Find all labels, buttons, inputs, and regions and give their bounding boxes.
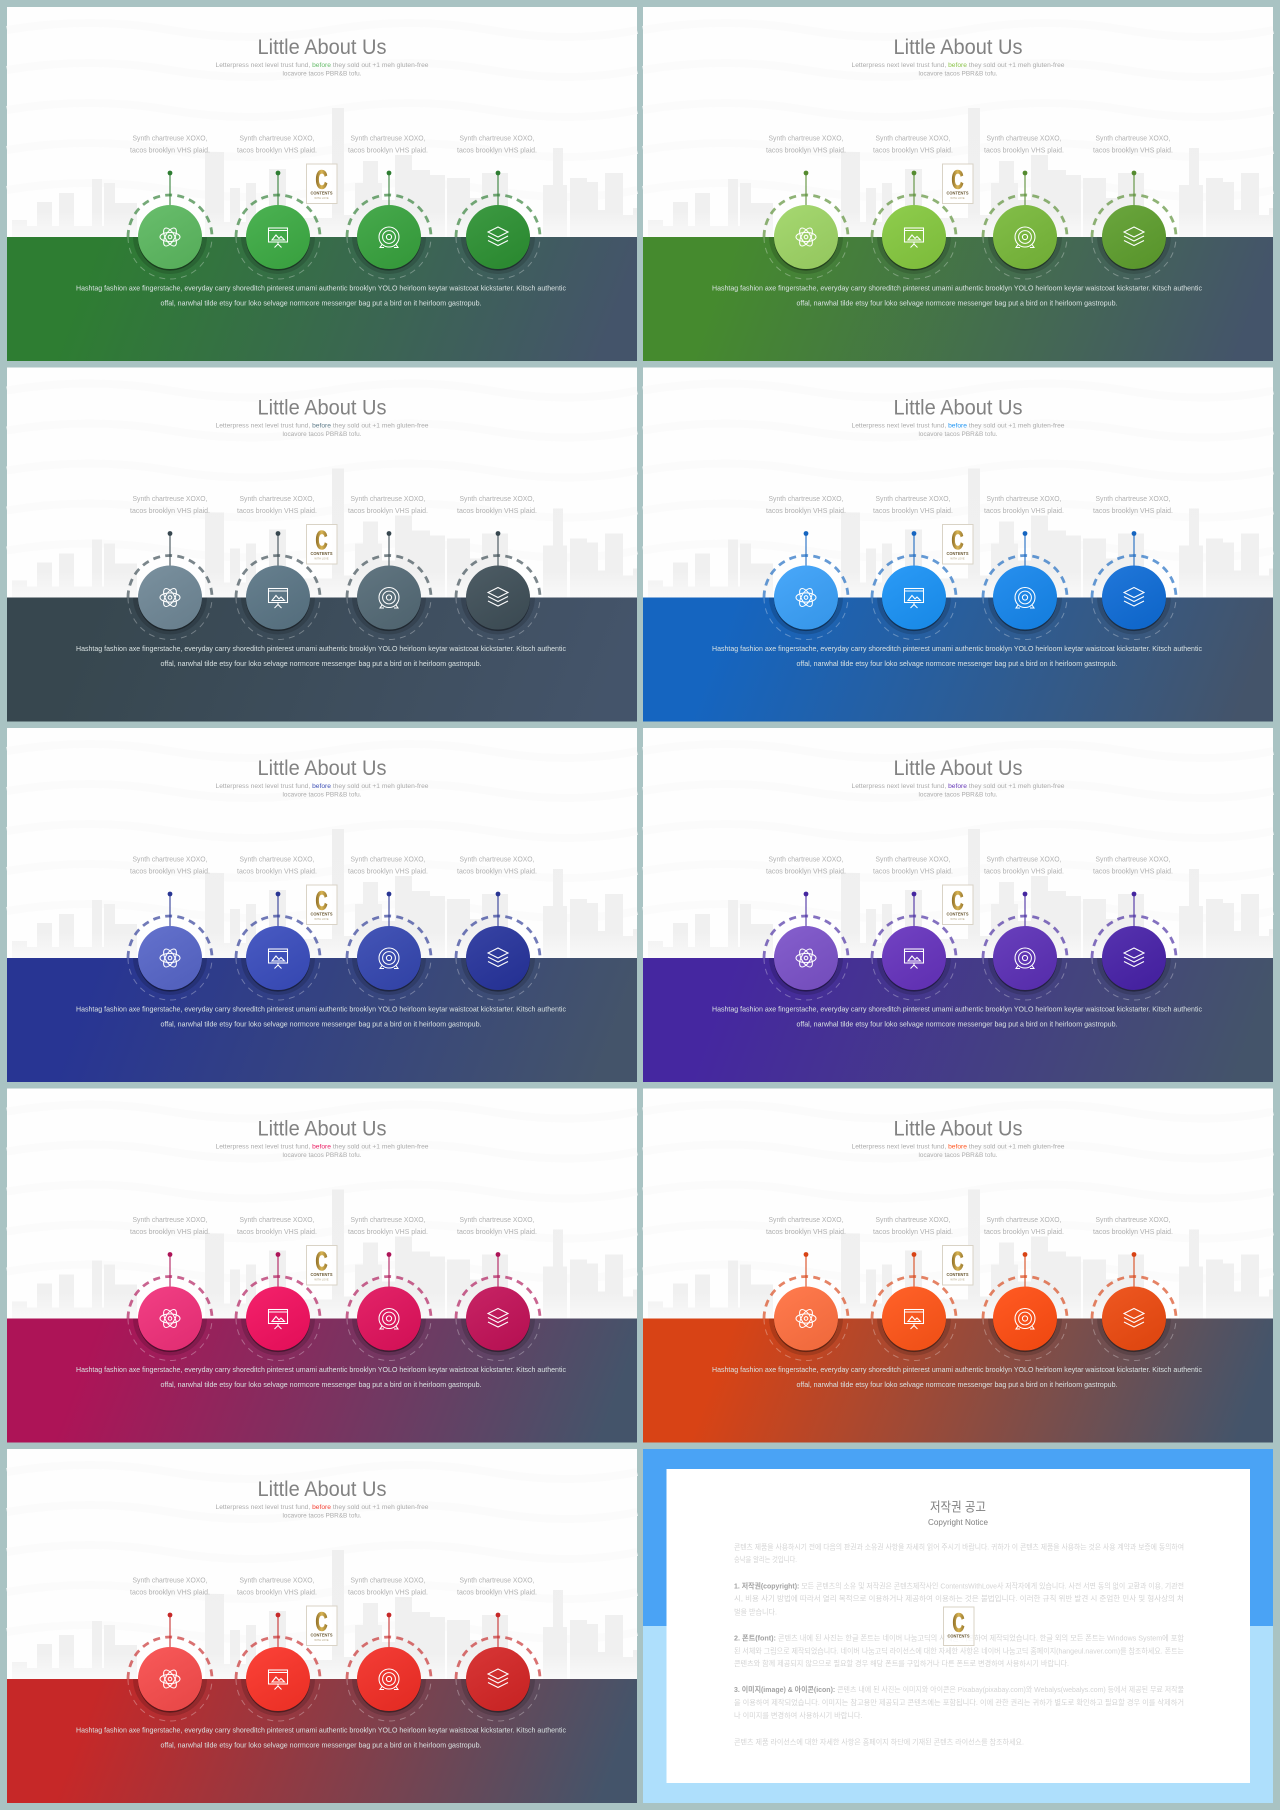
labels: Synth chartreuse XOXO, <box>460 854 534 864</box>
title: Little About Us <box>894 36 1022 59</box>
intro text <box>852 783 1065 798</box>
labels <box>130 1215 537 1236</box>
labels: tacos brooklyn VHS plaid. <box>984 146 1064 154</box>
labels: Synth chartreuse XOXO, <box>1096 1215 1170 1224</box>
labels: Synth chartreuse XOXO, <box>876 134 950 142</box>
labels: Synth chartreuse XOXO, <box>986 494 1062 503</box>
band text <box>76 1726 566 1750</box>
logo: CONTENTS <box>948 1634 970 1638</box>
white sheet <box>666 1469 1250 1783</box>
intro text <box>216 422 429 438</box>
labels: Synth chartreuse XOXO, <box>132 854 208 864</box>
logo: C <box>316 1246 328 1276</box>
labels: tacos brooklyn VHS plaid. <box>766 146 846 154</box>
labels: tacos brooklyn VHS plaid. <box>873 866 953 876</box>
labels: Synth chartreuse XOXO, <box>350 494 426 503</box>
band text: offal, narwhal tilde etsy four loko selvage normcore messenger bag put a bird on it heirloom gastropub. <box>796 300 1118 308</box>
labels: Synth chartreuse XOXO, <box>240 134 314 142</box>
node: layers <box>1092 892 1176 1000</box>
panel: pink <box>7 1088 637 1442</box>
intro text: locavore tacos PBR&B tofu. <box>282 792 362 798</box>
intro text <box>216 1144 429 1159</box>
node: presentation <box>236 1252 320 1360</box>
node: presentation <box>872 171 956 279</box>
labels: Synth chartreuse XOXO, <box>240 1215 314 1224</box>
logo <box>942 1246 973 1285</box>
band text: Hashtag fashion axe fingerstache, everyday carry shoreditch pinterest umami authentic brooklyn YOLO heirloom keytar waistcoat kickstarter. Kitsch authentic <box>76 645 566 653</box>
panel background <box>7 728 637 1082</box>
logo: WITH LOVE <box>950 556 965 560</box>
labels: tacos brooklyn VHS plaid. <box>130 506 210 515</box>
logo <box>942 524 973 564</box>
node: target <box>983 1252 1067 1360</box>
labels: tacos brooklyn VHS plaid. <box>130 866 210 876</box>
logo <box>306 1246 337 1285</box>
title: Little About Us <box>258 1118 386 1140</box>
band text: offal, narwhal tilde etsy four loko selvage normcore messenger bag put a bird on it heirloom gastropub. <box>796 1020 1118 1028</box>
labels: tacos brooklyn VHS plaid. <box>873 146 953 154</box>
node: target <box>347 531 431 640</box>
paragraph 1: 1. 저작권(copyright): 모든 콘텐츠의 소유 및 저작권은 콘텐츠제작사인 ContentsWithLove사 저작자에게 있습니다. 사전 서면 동의 없이 교환과 이용, 기관전 <box>734 1582 1184 1590</box>
intro text: locavore tacos PBR&B tofu. <box>918 431 998 438</box>
band text <box>76 1366 566 1389</box>
labels: Synth chartreuse XOXO, <box>350 1215 426 1224</box>
labels: tacos brooklyn VHS plaid. <box>237 866 317 876</box>
panel: orange <box>643 1088 1273 1442</box>
title: Little About Us <box>894 396 1022 420</box>
labels: tacos brooklyn VHS plaid. <box>457 146 537 154</box>
panel background <box>643 1088 1273 1442</box>
labels: Synth chartreuse XOXO, <box>986 1215 1062 1224</box>
intro text: Letterpress next level trust fund, before they sold out +1 meh gluten-free <box>216 62 429 69</box>
node: presentation <box>872 1252 956 1360</box>
title: Little About Us <box>258 36 386 59</box>
paragraph 2: 된 서체와 그림으로 제작되었습니다. 네이버 나눔고딕 라이선스에 대한 자세한 사항은 네이버 나눔고딕 홈페이지(hangeul.naver.com)를 참조하세요. 폰트는 <box>734 1646 1184 1656</box>
labels: Synth chartreuse XOXO, <box>768 134 844 142</box>
paragraph 2 <box>734 1634 1184 1668</box>
intro text <box>852 422 1065 438</box>
logo: CONTENTS <box>310 1272 332 1277</box>
skyline <box>7 23 637 237</box>
band text: offal, narwhal tilde etsy four loko selvage normcore messenger bag put a bird on it heirloom gastropub. <box>160 1742 482 1750</box>
logo: CONTENTS <box>946 190 968 196</box>
labels: tacos brooklyn VHS plaid. <box>873 506 953 515</box>
node: target <box>983 171 1067 279</box>
labels: Synth chartreuse XOXO, <box>240 854 314 864</box>
intro text: Letterpress next level trust fund, before they sold out +1 meh gluten-free <box>216 1144 429 1150</box>
logo: C <box>316 164 328 194</box>
panel background <box>7 7 637 361</box>
panel: purple <box>643 728 1273 1082</box>
intro text: Letterpress next level trust fund, before they sold out +1 meh gluten-free <box>216 1504 429 1511</box>
node: atom <box>764 1252 848 1360</box>
logo: CONTENTS <box>310 912 332 916</box>
intro text: locavore tacos PBR&B tofu. <box>918 1152 998 1159</box>
labels: tacos brooklyn VHS plaid. <box>348 146 428 154</box>
node: atom <box>128 171 212 279</box>
node: atom <box>128 1252 212 1360</box>
node: target <box>347 892 431 1000</box>
blue background bottom <box>643 1626 1273 1803</box>
logo: C <box>316 1606 328 1636</box>
labels: Synth chartreuse XOXO, <box>240 1576 314 1584</box>
logo: WITH LOVE <box>314 917 329 921</box>
logo <box>306 1606 337 1646</box>
paragraph 1 <box>734 1582 1184 1616</box>
paragraph 3: 나 이미지를 변경하여 사용하시기 바랍니다. <box>734 1711 862 1720</box>
logo <box>306 885 337 924</box>
paragraph 2: 콘텐츠와 함께 제공되지 않으므로 필요할 경우 해당 폰트를 구입하거나 다른 폰트로 변경하여 사용하시기 바랍니다. <box>734 1659 1069 1668</box>
colour band <box>7 598 637 722</box>
labels: tacos brooklyn VHS plaid. <box>457 1588 537 1596</box>
logo <box>942 164 973 204</box>
labels: Synth chartreuse XOXO, <box>986 854 1062 864</box>
labels: tacos brooklyn VHS plaid. <box>766 1227 846 1236</box>
labels <box>130 1576 537 1596</box>
skyline <box>643 1104 1273 1318</box>
logo <box>942 885 973 924</box>
node: target <box>983 531 1067 640</box>
logo: CONTENTS <box>310 1632 332 1638</box>
intro text <box>216 783 429 798</box>
band text: offal, narwhal tilde etsy four loko selvage normcore messenger bag put a bird on it heirloom gastropub. <box>796 660 1118 668</box>
labels: tacos brooklyn VHS plaid. <box>984 866 1064 876</box>
band text: offal, narwhal tilde etsy four loko selvage normcore messenger bag put a bird on it heirloom gastropub. <box>160 1020 482 1028</box>
node: layers <box>456 1613 540 1721</box>
blue background top <box>643 1449 1273 1626</box>
title: Little About Us <box>894 757 1022 780</box>
node: layers <box>456 1252 540 1360</box>
panel: lime <box>643 7 1273 361</box>
paragraph 1: 시, 비용 사기 방법에 따라서 열리 목적으로 이용하거나 제공하여 이용하는 것은 불법입니다. 이러한 규칙 위반 발견 시 준엄한 민사 및 형사상의 처 <box>734 1594 1184 1603</box>
colour band <box>643 598 1273 722</box>
intro text: locavore tacos PBR&B tofu. <box>918 70 998 78</box>
node: atom <box>764 171 848 279</box>
colour band <box>643 958 1273 1082</box>
skyline <box>7 744 637 958</box>
colour band <box>7 1318 637 1442</box>
logo: C <box>952 164 964 194</box>
panel background <box>643 728 1273 1082</box>
colour band <box>643 237 1273 361</box>
logo: CONTENTS <box>946 551 968 556</box>
logo: CONTENTS <box>946 1272 968 1277</box>
intro text: locavore tacos PBR&B tofu. <box>282 1152 362 1159</box>
node: presentation <box>872 531 956 640</box>
panel background <box>7 368 637 722</box>
intro text: Letterpress next level trust fund, before they sold out +1 meh gluten-free <box>852 62 1065 69</box>
skyline <box>643 384 1273 598</box>
node: atom <box>128 1613 212 1721</box>
labels: Synth chartreuse XOXO, <box>1096 134 1170 142</box>
intro text: Letterpress next level trust fund, before they sold out +1 meh gluten-free <box>852 783 1065 790</box>
intro text: locavore tacos PBR&B tofu. <box>918 792 998 798</box>
panel background <box>7 1088 637 1442</box>
band text: Hashtag fashion axe fingerstache, everyday carry shoreditch pinterest umami authentic brooklyn YOLO heirloom keytar waistcoat kickstarter. Kitsch authentic <box>76 1366 566 1374</box>
colour band <box>7 958 637 1082</box>
node: presentation <box>236 171 320 279</box>
band text <box>76 284 566 308</box>
node: presentation <box>236 1613 320 1721</box>
labels: tacos brooklyn VHS plaid. <box>130 1227 210 1236</box>
node: presentation <box>236 892 320 1000</box>
labels: tacos brooklyn VHS plaid. <box>1093 146 1173 154</box>
intro text: Letterpress next level trust fund, before they sold out +1 meh gluten-free <box>216 783 429 790</box>
title: Little About Us <box>258 757 386 780</box>
band text: Hashtag fashion axe fingerstache, everyday carry shoreditch pinterest umami authentic brooklyn YOLO heirloom keytar waistcoat kickstarter. Kitsch authentic <box>76 1726 566 1734</box>
band text: Hashtag fashion axe fingerstache, everyday carry shoreditch pinterest umami authentic brooklyn YOLO heirloom keytar waistcoat kickstarter. Kitsch authentic <box>712 1006 1202 1014</box>
labels: tacos brooklyn VHS plaid. <box>984 1227 1064 1236</box>
title: Little About Us <box>258 1478 386 1501</box>
labels <box>130 854 537 876</box>
labels: tacos brooklyn VHS plaid. <box>766 506 846 515</box>
node: target <box>983 892 1067 1000</box>
logo: C <box>952 1608 965 1638</box>
labels: Synth chartreuse XOXO, <box>132 1576 208 1584</box>
band text <box>712 645 1202 668</box>
labels <box>766 134 1173 154</box>
paragraph 1: 벌을 받습니다. <box>734 1608 777 1616</box>
panel: red <box>7 1449 637 1803</box>
labels: Synth chartreuse XOXO, <box>350 1576 426 1584</box>
labels: tacos brooklyn VHS plaid. <box>237 1227 317 1236</box>
labels: Synth chartreuse XOXO, <box>132 134 208 142</box>
intro paragraph <box>734 1542 1184 1564</box>
node: layers <box>1092 171 1176 279</box>
paragraph 2: 2. 폰트(font): 콘텐츠 내에 된 사진는 한글 폰트는 네이버 나눔고딕의 서체를 기본하여 제작되었습니다. 한글 외의 모든 폰트는 Windows System에 포함 <box>734 1634 1184 1642</box>
labels: tacos brooklyn VHS plaid. <box>1093 866 1173 876</box>
closing line: 콘텐츠 제품 라이선스에 대한 자세한 사항은 홈페이지 하단에 기재된 콘텐츠 라이선스를 참조하세요. <box>734 1738 1024 1746</box>
skyline <box>7 384 637 598</box>
labels <box>766 494 1173 515</box>
intro text <box>216 1504 429 1520</box>
labels: tacos brooklyn VHS plaid. <box>348 866 428 876</box>
logo: WITH LOVE <box>314 1638 329 1642</box>
logo: WITH LOVE <box>950 196 965 200</box>
logo: C <box>316 525 328 555</box>
labels: tacos brooklyn VHS plaid. <box>1093 1227 1173 1236</box>
band text: offal, narwhal tilde etsy four loko selvage normcore messenger bag put a bird on it heirloom gastropub. <box>160 1381 482 1389</box>
colour band <box>643 1318 1273 1442</box>
labels: tacos brooklyn VHS plaid. <box>873 1227 953 1236</box>
labels: Synth chartreuse XOXO, <box>768 494 844 503</box>
logo: WITH LOVE <box>950 1278 965 1282</box>
labels: Synth chartreuse XOXO, <box>460 1576 534 1584</box>
band text: offal, narwhal tilde etsy four loko selvage normcore messenger bag put a bird on it heirloom gastropub. <box>796 1381 1118 1389</box>
band text: Hashtag fashion axe fingerstache, everyday carry shoreditch pinterest umami authentic brooklyn YOLO heirloom keytar waistcoat kickstarter. Kitsch authentic <box>712 645 1202 653</box>
labels: tacos brooklyn VHS plaid. <box>1093 506 1173 515</box>
node: target <box>347 1252 431 1360</box>
band text: Hashtag fashion axe fingerstache, everyday carry shoreditch pinterest umami authentic brooklyn YOLO heirloom keytar waistcoat kickstarter. Kitsch authentic <box>76 284 566 292</box>
colour band <box>7 237 637 361</box>
panel background <box>643 7 1273 361</box>
logo: C <box>316 886 328 916</box>
node: target <box>347 1613 431 1721</box>
labels: Synth chartreuse XOXO, <box>876 854 950 864</box>
labels: Synth chartreuse XOXO, <box>768 854 844 864</box>
title: Little About Us <box>894 1118 1022 1140</box>
labels: tacos brooklyn VHS plaid. <box>237 146 317 154</box>
band text <box>712 1006 1202 1028</box>
node: layers <box>456 171 540 279</box>
labels: Synth chartreuse XOXO, <box>986 134 1062 142</box>
band text <box>76 1006 566 1028</box>
logo: WITH LOVE <box>314 196 329 200</box>
labels: Synth chartreuse XOXO, <box>240 494 314 503</box>
intro text <box>216 62 429 78</box>
labels: tacos brooklyn VHS plaid. <box>457 1227 537 1236</box>
labels: Synth chartreuse XOXO, <box>876 494 950 503</box>
node: atom <box>128 892 212 1000</box>
band text <box>712 284 1202 308</box>
labels: tacos brooklyn VHS plaid. <box>348 506 428 515</box>
logo <box>306 164 337 204</box>
labels: tacos brooklyn VHS plaid. <box>130 146 210 154</box>
labels: tacos brooklyn VHS plaid. <box>457 866 537 876</box>
labels: Synth chartreuse XOXO, <box>1096 854 1170 864</box>
labels: Synth chartreuse XOXO, <box>350 854 426 864</box>
logo: C <box>952 1246 964 1276</box>
band text <box>712 1366 1202 1389</box>
panel background <box>7 1449 637 1803</box>
intro text: locavore tacos PBR&B tofu. <box>282 70 362 78</box>
logo: CONTENTS <box>946 912 968 916</box>
node: atom <box>128 531 212 640</box>
logo <box>306 524 337 564</box>
logo: WITH LOVE <box>950 917 965 921</box>
panel: copyright notice <box>643 1449 1273 1803</box>
node: layers <box>1092 531 1176 640</box>
intro text: locavore tacos PBR&B tofu. <box>282 431 362 438</box>
title: Little About Us <box>258 396 386 420</box>
node: layers <box>1092 1252 1176 1360</box>
node: atom <box>764 892 848 1000</box>
labels <box>766 1215 1173 1236</box>
labels: Synth chartreuse XOXO, <box>460 494 534 503</box>
intro paragraph: 콘텐츠 제품을 사용하시기 전에 다음의 판권과 소유권 사항을 자세히 읽어 주시기 바랍니다. 귀하가 이 콘텐츠 제품을 사용하는 것은 사용 계약과 보증에 동의하여 <box>734 1542 1184 1552</box>
labels: tacos brooklyn VHS plaid. <box>457 506 537 515</box>
colour band <box>7 1679 637 1803</box>
labels: tacos brooklyn VHS plaid. <box>984 506 1064 515</box>
node: presentation <box>236 531 320 640</box>
labels: tacos brooklyn VHS plaid. <box>348 1588 428 1596</box>
intro text: Letterpress next level trust fund, before they sold out +1 meh gluten-free <box>852 422 1065 430</box>
labels: Synth chartreuse XOXO, <box>460 1215 534 1224</box>
labels: tacos brooklyn VHS plaid. <box>237 1588 317 1596</box>
logo: CONTENTS <box>310 190 332 196</box>
labels: tacos brooklyn VHS plaid. <box>348 1227 428 1236</box>
panel: indigo <box>7 728 637 1082</box>
intro paragraph: 승낙을 알리는 것입니다. <box>734 1555 797 1564</box>
panel: green <box>7 7 637 361</box>
labels: Synth chartreuse XOXO, <box>132 1215 208 1224</box>
band text: offal, narwhal tilde etsy four loko selvage normcore messenger bag put a bird on it heirloom gastropub. <box>160 660 482 668</box>
intro text <box>852 62 1065 78</box>
paragraph 3 <box>734 1685 1184 1720</box>
notice subheading: Copyright Notice <box>928 1517 988 1527</box>
band text: offal, narwhal tilde etsy four loko selvage normcore messenger bag put a bird on it heirloom gastropub. <box>160 300 482 308</box>
band text: Hashtag fashion axe fingerstache, everyday carry shoreditch pinterest umami authentic brooklyn YOLO heirloom keytar waistcoat kickstarter. Kitsch authentic <box>76 1006 566 1014</box>
skyline <box>643 23 1273 237</box>
panel: blue <box>643 368 1273 722</box>
labels: Synth chartreuse XOXO, <box>768 1215 844 1224</box>
node: target <box>347 171 431 279</box>
node: atom <box>764 531 848 640</box>
labels: Synth chartreuse XOXO, <box>350 134 426 142</box>
paragraph 3: 3. 이미지(image) & 아이콘(icon): 콘텐츠 내에 된 사진는 이미지와 아이콘은 Pixabay(pixabay.com)와 Webalys(webalys.com) 등에서 제공된 무료 저작물 <box>734 1685 1184 1694</box>
panel: slate <box>7 368 637 722</box>
logo: WITH LOVE <box>314 1278 329 1282</box>
intro text <box>852 1144 1065 1159</box>
skyline <box>643 744 1273 958</box>
skyline <box>7 1465 637 1679</box>
intro text: Letterpress next level trust fund, before they sold out +1 meh gluten-free <box>216 422 429 430</box>
labels <box>130 494 537 515</box>
logo: WITH LOVE <box>314 556 329 560</box>
intro text: Letterpress next level trust fund, before they sold out +1 meh gluten-free <box>852 1144 1065 1150</box>
labels: tacos brooklyn VHS plaid. <box>130 1588 210 1596</box>
logo: C <box>952 886 964 916</box>
labels: Synth chartreuse XOXO, <box>1096 494 1170 503</box>
logo: C <box>952 525 964 555</box>
paragraph 3: 을 이용하여 제작되었습니다. 이미지는 참고용만 제공되고 콘텐츠에는 포함됩니다. 이에 관한 권리는 귀하가 별도로 확인하고 필요할 경우 이를 삭제하거 <box>734 1698 1184 1707</box>
band text: Hashtag fashion axe fingerstache, everyday carry shoreditch pinterest umami authentic brooklyn YOLO heirloom keytar waistcoat kickstarter. Kitsch authentic <box>712 284 1202 292</box>
labels: Synth chartreuse XOXO, <box>876 1215 950 1224</box>
band text <box>76 645 566 668</box>
node: presentation <box>872 892 956 1000</box>
band text: Hashtag fashion axe fingerstache, everyday carry shoreditch pinterest umami authentic brooklyn YOLO heirloom keytar waistcoat kickstarter. Kitsch authentic <box>712 1366 1202 1374</box>
panel background <box>643 368 1273 722</box>
node: layers <box>456 892 540 1000</box>
labels: tacos brooklyn VHS plaid. <box>237 506 317 515</box>
skyline <box>7 1104 637 1318</box>
logo: CONTENTS <box>310 551 332 556</box>
labels <box>766 854 1173 876</box>
logo <box>944 1607 974 1646</box>
notice heading: 저작권 공고 <box>930 1500 986 1514</box>
labels: Synth chartreuse XOXO, <box>460 134 534 142</box>
labels: tacos brooklyn VHS plaid. <box>766 866 846 876</box>
node: layers <box>456 531 540 640</box>
intro text: locavore tacos PBR&B tofu. <box>282 1512 362 1520</box>
labels <box>130 134 537 154</box>
labels: Synth chartreuse XOXO, <box>132 494 208 503</box>
